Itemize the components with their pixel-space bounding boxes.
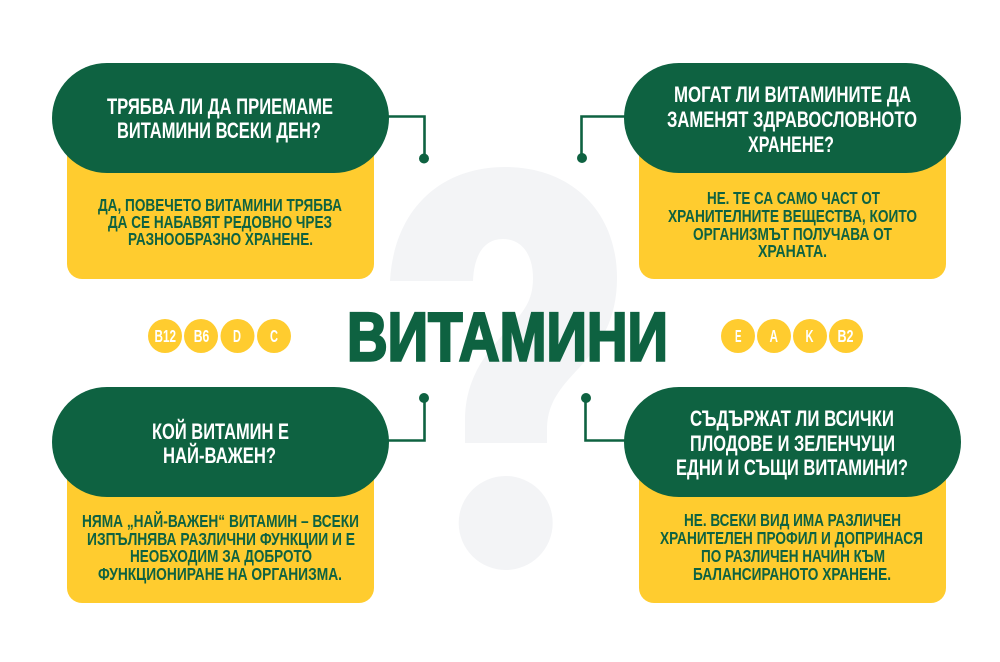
vitamin badges: right group: E	[735, 326, 742, 346]
question pill: top right	[624, 63, 961, 173]
answer card: top right: ХРАНИТЕЛНИТЕ ВЕЩЕСТВА, КОИТО	[668, 206, 917, 226]
answer card: top left: ДА, ПОВЕЧЕТО ВИТАМИНИ ТРЯБВА	[98, 195, 342, 215]
answer card: bottom left: НЕОБХОДИМ ЗА ДОБРОТО	[130, 546, 312, 566]
icon: background question mark	[390, 167, 617, 570]
question pill: bottom right: СЪДЪРЖАТ ЛИ ВСИЧКИ	[690, 406, 894, 431]
panel: top left question	[52, 63, 429, 279]
answer card: top right	[639, 140, 946, 279]
answer card: bottom left: НЯМА „НАЙ-ВАЖЕН“ ВИТАМИН – ВСЕКИ	[82, 510, 359, 531]
panel: top right question	[577, 63, 961, 279]
question pill: bottom left	[52, 387, 389, 497]
question pill: bottom right: ПЛОДОВЕ И ЗЕЛЕНЧУЦИ	[690, 431, 895, 456]
vitamin badges: left group	[148, 319, 291, 353]
question pill: bottom right	[624, 387, 961, 497]
vitamin badges: left group: C	[270, 326, 278, 346]
vitamin badges: left group: D	[233, 326, 241, 346]
panel: bottom right question	[581, 387, 961, 603]
vitamin badges: left group: B6	[194, 326, 209, 346]
vitamin badges: right group	[721, 319, 863, 353]
vitamin badges: right group: K	[806, 326, 814, 346]
answer card: top left: РАЗНООБРАЗНО ХРАНЕНЕ.	[128, 229, 313, 249]
vitamin badges: right group: A	[770, 326, 778, 346]
title: ВИТАМИНИ	[347, 298, 668, 376]
question pill: top left: ВИТАМИНИ ВСЕКИ ДЕН?	[117, 118, 321, 143]
answer card: bottom left: ИЗПЪЛНЯВА РАЗЛИЧНИ ФУНКЦИИ И Е	[87, 529, 355, 549]
vitamin badges: right group: B2	[838, 326, 854, 346]
answer card: bottom left: ФУНКЦИОНИРАНЕ НА ОРГАНИЗМА.	[98, 564, 342, 584]
connector: top right	[577, 116, 625, 163]
answer card: bottom right: БАЛАНСИРАНОТО ХРАНЕНЕ.	[693, 564, 891, 584]
answer card: top right: ХРАНАТА.	[758, 241, 827, 261]
connector: top left	[388, 116, 429, 164]
answer card: bottom right: ПО РАЗЛИЧЕН НАЧИН КЪМ	[701, 546, 885, 566]
vitamin badges: left group: B12	[154, 326, 176, 346]
question pill: bottom right: ЕДНИ И СЪЩИ ВИТАМИНИ?	[676, 455, 908, 480]
connector: bottom right	[581, 393, 625, 440]
answer card: bottom right	[639, 464, 946, 603]
connector: bottom left	[388, 393, 429, 440]
question pill: bottom left: КОЙ ВИТАМИН Е	[152, 419, 289, 444]
question pill: top right: ЗАМЕНЯТ ЗДРАВОСЛОВНОТО	[667, 107, 917, 132]
answer card: bottom right: НЕ. ВСЕКИ ВИД ИМА РАЗЛИЧЕН	[684, 510, 901, 530]
question pill: bottom left: НАЙ-ВАЖЕН?	[163, 443, 276, 468]
answer card: top left: ДА СЕ НАБАВЯТ РЕДОВНО ЧРЕЗ	[108, 212, 332, 232]
question pill: top right: МОГАТ ЛИ ВИТАМИНИТЕ ДА	[674, 82, 911, 107]
answer card: top right: ОРГАНИЗМЪТ ПОЛУЧАВА ОТ	[693, 224, 892, 244]
question pill: top left: ТРЯБВА ЛИ ДА ПРИЕМАМЕ	[107, 94, 333, 119]
panel: bottom left question	[52, 387, 429, 603]
question pill: top left	[52, 63, 389, 173]
answer card: bottom left	[67, 464, 374, 603]
answer card: bottom right: ХРАНИТЕЛЕН ПРОФИЛ И ДОПРИНАСЯ	[660, 528, 923, 548]
question pill: top right: ХРАНЕНЕ?	[748, 132, 834, 157]
answer card: top left	[67, 140, 374, 279]
answer card: top right: НЕ. ТЕ СА САМО ЧАСТ ОТ	[707, 188, 880, 208]
